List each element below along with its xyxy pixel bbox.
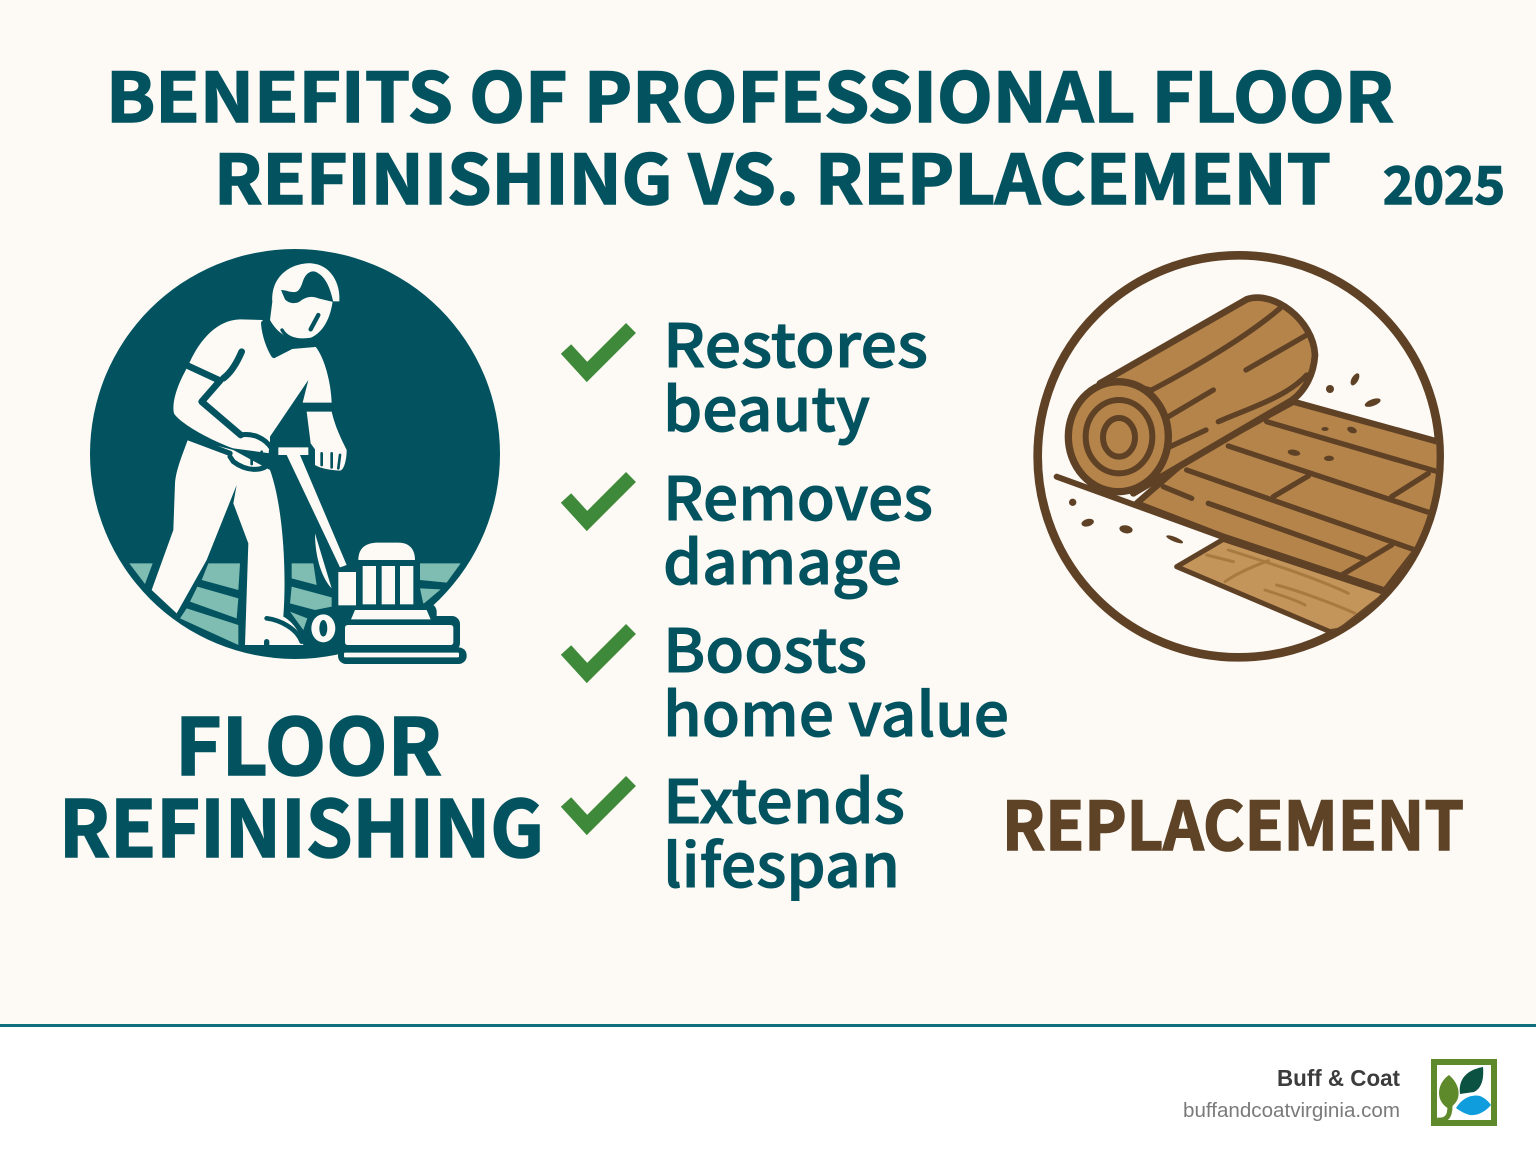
- heading: floor refinishing: REFINISHING: [59, 768, 544, 880]
- footer brand text: [1183, 1065, 1400, 1122]
- benefit: removes damage: damage: [663, 515, 902, 602]
- head: [270, 263, 339, 340]
- lighter plank: [1177, 539, 1387, 632]
- benefit: extends lifespan: [566, 754, 905, 905]
- sander: [358, 543, 415, 560]
- title: 2025: [1383, 144, 1505, 219]
- benefit: restores beauty: [566, 298, 928, 449]
- benefit: extends lifespan: lifespan: [663, 818, 900, 905]
- footer brand text: buffandcoatvirginia.com: [1183, 1100, 1400, 1122]
- benefit: boosts home value: Boosts: [663, 603, 867, 690]
- icon: worker with floor sander in teal circle: [90, 249, 500, 664]
- benefit: restores beauty: beauty: [663, 362, 870, 449]
- title: [106, 43, 1505, 224]
- heading: replacement: REPLACEMENT: [1002, 773, 1464, 870]
- torso and arm: [173, 319, 332, 453]
- benefit: restores beauty: Restores: [663, 298, 928, 385]
- trousers: [152, 438, 303, 645]
- heading: floor refinishing: FLOOR: [175, 686, 442, 798]
- benefit: removes damage: Removes: [663, 451, 933, 538]
- benefit: extends lifespan: Extends: [663, 754, 905, 841]
- hair: [281, 271, 333, 303]
- icon: rolled up wood flooring in brown ring: [1038, 255, 1450, 657]
- title: REFINISHING VS. REPLACEMENT: [214, 125, 1331, 224]
- floor boards: [1137, 402, 1450, 591]
- benefit: removes damage: [566, 451, 933, 602]
- icon: buff and coat logo: [1434, 1062, 1494, 1123]
- title: BENEFITS OF PROFESSIONAL FLOOR: [106, 43, 1394, 142]
- handle: [278, 447, 347, 567]
- roll: [1100, 298, 1315, 493]
- right forearm and hand: [307, 412, 347, 471]
- benefit: boosts home value: home value: [663, 667, 1009, 754]
- benefit: boosts home value: [566, 603, 1009, 754]
- footer brand text: Buff & Coat: [1277, 1065, 1400, 1091]
- heading: floor refinishing: [59, 686, 544, 880]
